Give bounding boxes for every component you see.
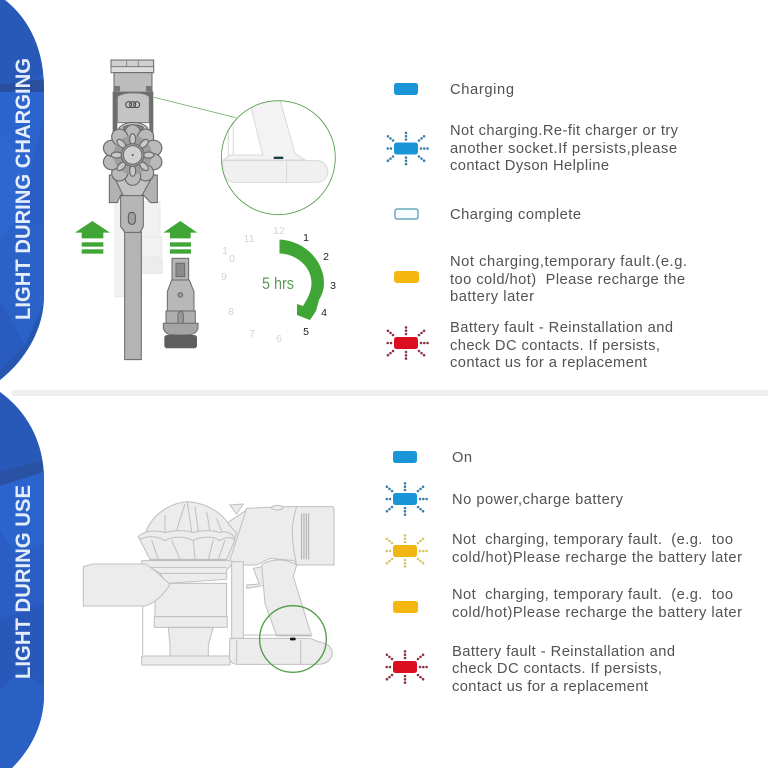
text: temporary fault, flashing: Not charging, temporary fault. (e.g. too bbox=[452, 532, 733, 548]
text: battery fault, in use: Battery fault - Reinstallation and bbox=[452, 644, 675, 660]
illustration: vacuum docked on charger bbox=[75, 60, 335, 360]
text: charging: Charging bbox=[450, 82, 514, 98]
clock: five hour charge bbox=[221, 225, 336, 345]
text: temporary fault bbox=[450, 254, 687, 305]
text: temporary fault: battery later bbox=[450, 289, 534, 305]
lower body bbox=[109, 175, 157, 203]
text: not charging, re-fit charger bbox=[450, 123, 679, 174]
handle bbox=[262, 560, 312, 636]
post bbox=[232, 562, 243, 638]
light: solid amber, in use bbox=[393, 601, 418, 613]
light: flashing blue bbox=[386, 132, 428, 164]
text: not charging, re-fit charger: contact Dyson Helpline bbox=[450, 158, 609, 174]
wand bbox=[121, 196, 143, 360]
bin bbox=[142, 561, 232, 665]
text: temporary fault, flashing: cold/hot)Please recharge the battery later bbox=[452, 550, 742, 566]
heading: light during charging: LIGHT DURING CHARGING bbox=[12, 58, 35, 320]
arrow: green right bbox=[163, 221, 197, 254]
arrow: five hour arc bbox=[280, 240, 324, 320]
clock numerals: faded: 0 bbox=[229, 253, 235, 265]
text: temporary fault, solid: cold/hot)Please recharge the battery later bbox=[452, 605, 742, 621]
light: outline, charging complete bbox=[395, 209, 418, 219]
light: solid blue, on bbox=[393, 451, 417, 463]
callout: green circle with light bbox=[260, 606, 326, 672]
illustration: handheld vacuum bbox=[83, 502, 334, 672]
text: on: On bbox=[452, 450, 472, 466]
clock numerals: faded: 8 bbox=[228, 306, 234, 318]
clock numerals: faded: 11 bbox=[244, 233, 255, 245]
light: flashing red bbox=[386, 326, 428, 359]
text: battery fault, in use: contact us for a replacement bbox=[452, 679, 648, 695]
text: temporary fault: too cold/hot) Please recharge the bbox=[450, 272, 685, 288]
exhaust filter bbox=[230, 504, 309, 565]
callout: zoom circle with charging light bbox=[221, 100, 335, 215]
text: not charging, re-fit charger: Not charging.Re-fit charger or try bbox=[450, 123, 679, 139]
panel: light during use side tab bbox=[0, 392, 44, 768]
clock numerals: faded: 1 bbox=[222, 245, 228, 257]
clock numerals: charged hours: 5 bbox=[303, 326, 309, 338]
clock numerals: charged hours bbox=[303, 232, 336, 338]
cyclone flower bbox=[101, 125, 164, 185]
clock numerals: faded: 6 bbox=[276, 333, 282, 345]
light: solid blue, charging bbox=[394, 83, 418, 95]
trigger bbox=[247, 567, 267, 588]
cyclone dome bbox=[138, 502, 247, 562]
clock numerals: faded: 7 bbox=[249, 328, 255, 340]
clock numerals: charged hours: 1 bbox=[303, 232, 309, 244]
text: temporary fault, solid bbox=[452, 587, 742, 621]
text: battery fault: check DC contacts. If persists, bbox=[450, 338, 660, 354]
text: no power: No power,charge battery bbox=[452, 492, 624, 508]
light: flashing amber bbox=[385, 534, 427, 567]
text: temporary fault, solid: Not charging, temporary fault. (e.g. too bbox=[452, 587, 733, 603]
panel: light during charging side tab bbox=[0, 0, 44, 380]
light: solid amber bbox=[394, 271, 419, 283]
nozzle bbox=[83, 564, 170, 606]
heading: light during use: LIGHT DURING USE bbox=[12, 485, 35, 679]
text: charging complete: Charging complete bbox=[450, 207, 581, 223]
text: temporary fault: Not charging,temporary fault.(e.g. bbox=[450, 254, 687, 270]
charger bracket bbox=[111, 60, 154, 147]
brush tool bbox=[163, 258, 198, 348]
light: flashing red, in use bbox=[385, 650, 427, 683]
clock numerals: charged hours: 4 bbox=[321, 307, 327, 319]
text: battery fault: Battery fault - Reinstallation and bbox=[450, 320, 673, 336]
text: not charging, re-fit charger: another socket.If persists,please bbox=[450, 141, 677, 157]
clock numerals: faded bbox=[221, 225, 285, 345]
light: flashing blue, no power bbox=[385, 482, 427, 515]
label: 5 hrs: 5 hrs bbox=[262, 274, 294, 293]
battery bbox=[229, 635, 332, 664]
clock numerals: charged hours: 2 bbox=[323, 251, 329, 263]
ghost handle behind the wand bbox=[115, 202, 162, 297]
text: battery fault, in use: check DC contacts. If persists, bbox=[452, 661, 662, 677]
clock numerals: charged hours: 3 bbox=[330, 280, 336, 292]
text: battery fault: contact us for a replacement bbox=[450, 355, 647, 371]
text: battery fault bbox=[450, 320, 673, 371]
text: temporary fault, flashing bbox=[452, 532, 742, 566]
clock numerals: faded: 9 bbox=[221, 271, 227, 283]
motor body bbox=[230, 507, 334, 565]
arrow: green left bbox=[75, 221, 110, 254]
clock numerals: faded: 12 bbox=[273, 225, 285, 237]
text: battery fault, in use bbox=[452, 644, 675, 695]
callout leader line bbox=[154, 97, 236, 118]
dyson logo bbox=[126, 102, 140, 108]
